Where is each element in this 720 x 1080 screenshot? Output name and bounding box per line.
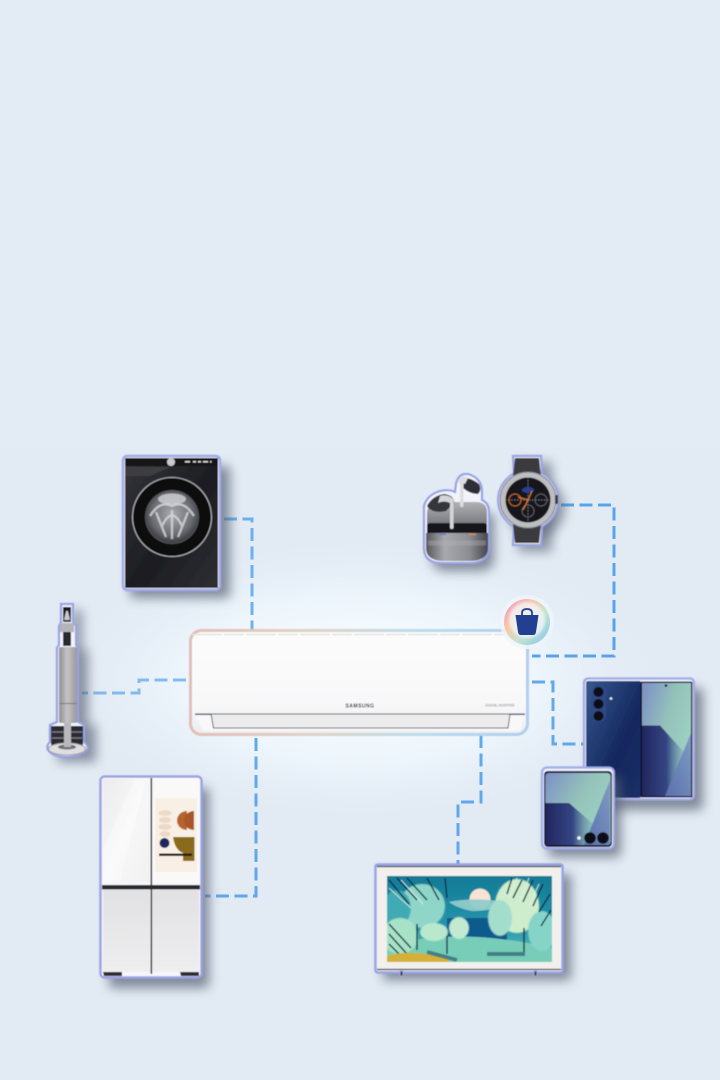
inverter label: DIGITAL INVERTER: [486, 704, 515, 708]
air vent flap: [211, 714, 510, 728]
icon: shopping bag badge: [500, 595, 554, 649]
product: smartwatch: [498, 456, 565, 552]
product: refrigerator: [100, 776, 209, 988]
connector: fridge to air conditioner: [205, 738, 256, 896]
connector: phones to air conditioner: [532, 682, 585, 744]
connector lines: [82, 505, 614, 896]
product: foldable phone: [584, 678, 703, 810]
connector: TV to air conditioner: [458, 735, 481, 864]
art panel on fridge door: [155, 798, 197, 872]
product: earbuds case: [424, 474, 494, 571]
product: washing machine: [123, 456, 230, 598]
product: flip phone: [542, 768, 621, 857]
connector: vacuum to air conditioner: [82, 680, 186, 693]
brand logo: SAMSUNG: [345, 704, 375, 710]
product: stick vacuum: [47, 604, 96, 762]
central glow: [60, 540, 660, 820]
connector: washer to air conditioner: [224, 519, 252, 630]
TV artwork: [386, 875, 553, 962]
product: frame TV: [376, 864, 571, 980]
connector: wearables to air conditioner: [532, 505, 614, 656]
air conditioner: [190, 630, 528, 734]
